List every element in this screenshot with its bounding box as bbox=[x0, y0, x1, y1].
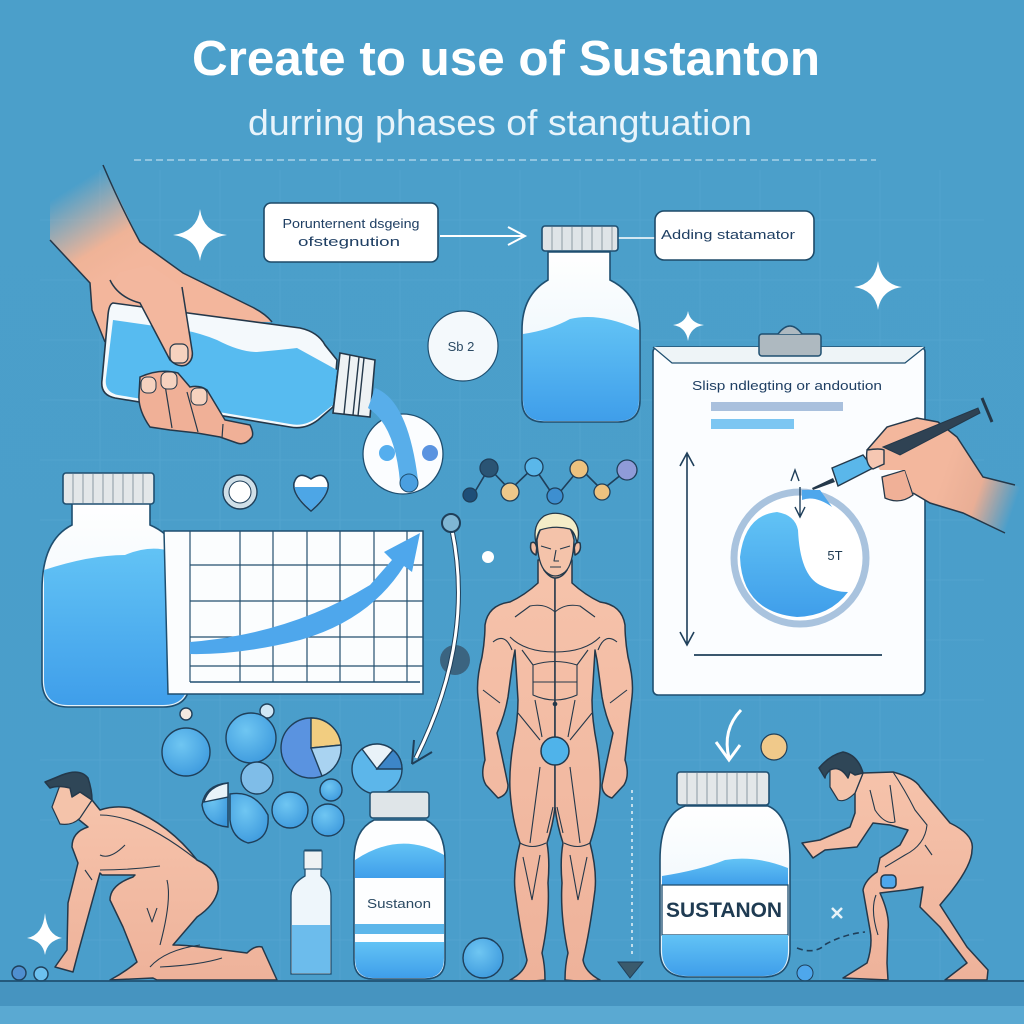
badge: step 2: Sb 2 bbox=[448, 339, 474, 354]
label: step two bbox=[600, 211, 814, 260]
icon: sparkle left bbox=[173, 209, 227, 261]
bending figure right bbox=[802, 752, 988, 980]
bottle body bbox=[102, 303, 337, 428]
small arrow and coin bbox=[716, 710, 787, 760]
body bbox=[55, 800, 277, 980]
arrow: label to bottle bbox=[440, 227, 525, 245]
line chart bbox=[164, 531, 423, 694]
subtitle: durring phases of stangtuation bbox=[248, 102, 752, 143]
bottle: Sustanon large: SUSTANON bbox=[666, 899, 782, 922]
body left half bbox=[478, 560, 555, 981]
pill: bottom bbox=[463, 938, 503, 978]
label: step one: ofstegnution bbox=[298, 235, 400, 249]
icon: heart bbox=[294, 475, 328, 511]
small marks right bbox=[797, 908, 865, 981]
bottle cap bbox=[333, 353, 375, 417]
standing figure bbox=[478, 513, 632, 981]
ground line bbox=[0, 980, 1024, 982]
curved arrow to bottle bbox=[412, 514, 494, 764]
badge: step 2 bbox=[428, 311, 498, 381]
bottle: Sustanon large bbox=[660, 772, 790, 977]
label: step one: Porunternent dsgeing bbox=[282, 217, 420, 231]
syringe barrel bbox=[832, 455, 873, 486]
title: Create to use of Sustanton bbox=[192, 32, 820, 86]
icon: sparkle middle bbox=[673, 311, 704, 341]
icon: ring bbox=[223, 475, 257, 509]
label: step two: Adding statamator bbox=[661, 228, 795, 242]
clipboard bbox=[653, 326, 925, 695]
measure line bbox=[618, 790, 643, 978]
hand and arm bbox=[867, 418, 1020, 540]
fingers behind syringe bbox=[882, 470, 913, 501]
muscle lines bbox=[483, 605, 627, 900]
hand pouring bottle bbox=[50, 165, 375, 444]
icon: sparkle right bbox=[854, 261, 902, 310]
large bottle left bbox=[42, 473, 190, 707]
icon: sparkle bottom left bbox=[27, 913, 62, 955]
pour stream and dish bbox=[363, 388, 443, 494]
fingers bbox=[139, 371, 253, 444]
clipboard: Slisp ndlegting or andoution bbox=[692, 379, 882, 393]
thumb bbox=[110, 265, 192, 366]
bottle: top center bbox=[522, 226, 640, 422]
head bbox=[830, 760, 863, 801]
clipboard: 5T bbox=[827, 548, 843, 563]
small dots left bbox=[12, 966, 48, 981]
body bbox=[802, 772, 988, 980]
ball on figure bbox=[541, 737, 569, 765]
molecule chain bbox=[463, 458, 637, 504]
hand with syringe bbox=[812, 398, 1020, 540]
bottle: Sustanon small: Sustanon bbox=[367, 897, 431, 911]
blue vial in hand bbox=[881, 875, 896, 888]
label: step one bbox=[264, 203, 438, 262]
body right half bbox=[555, 560, 632, 981]
small vial bbox=[291, 850, 331, 974]
bottle: Sustanon small bbox=[354, 792, 445, 979]
pill cluster bbox=[162, 704, 402, 843]
head bbox=[531, 525, 580, 578]
muscle lines bbox=[870, 772, 932, 935]
kneeling figure left bbox=[45, 772, 277, 980]
arm and back of hand bbox=[50, 165, 272, 342]
thumb bbox=[867, 449, 884, 469]
muscle lines bbox=[85, 815, 222, 967]
head bbox=[52, 785, 92, 824]
